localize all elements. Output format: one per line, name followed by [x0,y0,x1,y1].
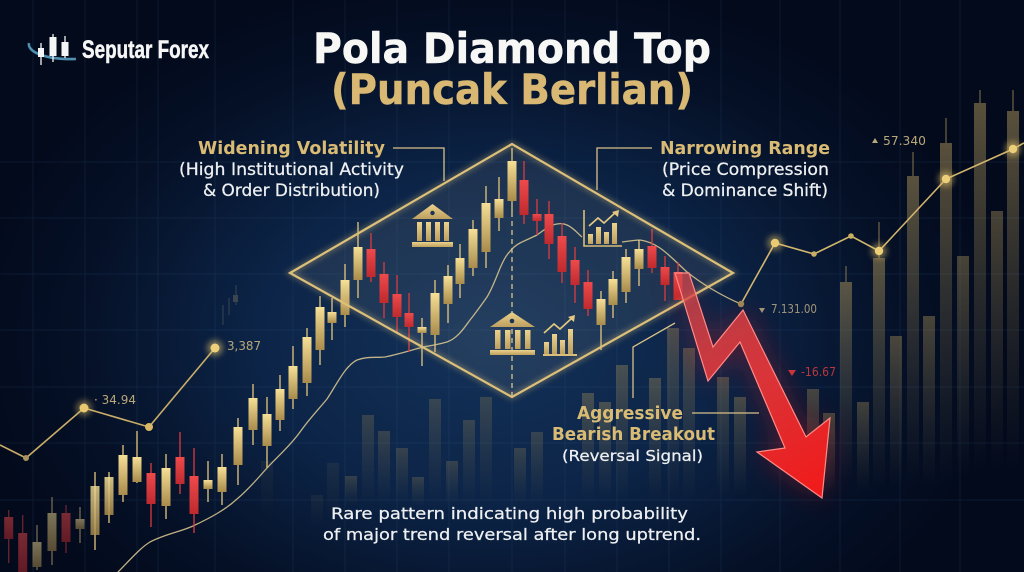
faint background candles [223,285,238,325]
moving average curve [118,224,741,572]
logo: Seputar Forex [29,34,209,65]
candlesticks: dim early section [4,497,85,572]
label: narrowing range: & Dominance Shift) [662,181,828,200]
background volume bars [261,90,1019,530]
left trend line with value points [0,340,223,461]
diamond outline [290,144,733,397]
label: widening volatility [179,139,404,200]
value labels: -16.67 [801,365,836,379]
icon: growth chart lower [543,315,577,356]
dashed centre line [511,212,513,397]
label: narrowing range: Narrowing Range [660,139,830,159]
right trend line with value points [738,141,1024,307]
footer note: of major trend reversal after long uptrend. [323,525,701,544]
label: widening volatility: (High Institutional Activity [179,160,404,179]
title: Pola Diamond Top [313,24,711,73]
label: aggressive bearish breakout: (Reversal Signal) [562,447,703,465]
connector lines [393,148,759,413]
footer note [323,504,701,544]
value labels: 3,387 [227,339,261,353]
value labels: · 34.94 [94,393,136,407]
candlesticks: inside diamond [366,148,682,366]
arrow: bearish breakout [674,273,830,498]
diamond fill [290,144,733,397]
logo: Seputar Forex: Seputar Forex [82,36,209,64]
candlesticks: uptrend [90,222,362,550]
label: narrowing range: (Price Compression [662,160,829,179]
footer note: Rare pattern indicating high probability [331,504,688,523]
icon: growth chart upper [584,210,622,246]
title [313,24,711,114]
value labels: 57.340 [883,134,926,148]
label: aggressive bearish breakout: Bearish Breakout [552,425,715,445]
label: aggressive bearish breakout: Aggressive [577,404,683,424]
label: narrowing range [660,139,830,200]
icon: bank lower [490,312,535,355]
label: aggressive bearish breakout [552,404,715,465]
title: (Puncak Berlian) [331,65,693,114]
label: widening volatility: Widening Volatility [198,139,386,159]
value labels [94,134,926,407]
icon: bank upper [412,204,453,247]
label: widening volatility: & Order Distribution) [203,181,380,200]
value labels: 7.131.00 [771,302,817,316]
